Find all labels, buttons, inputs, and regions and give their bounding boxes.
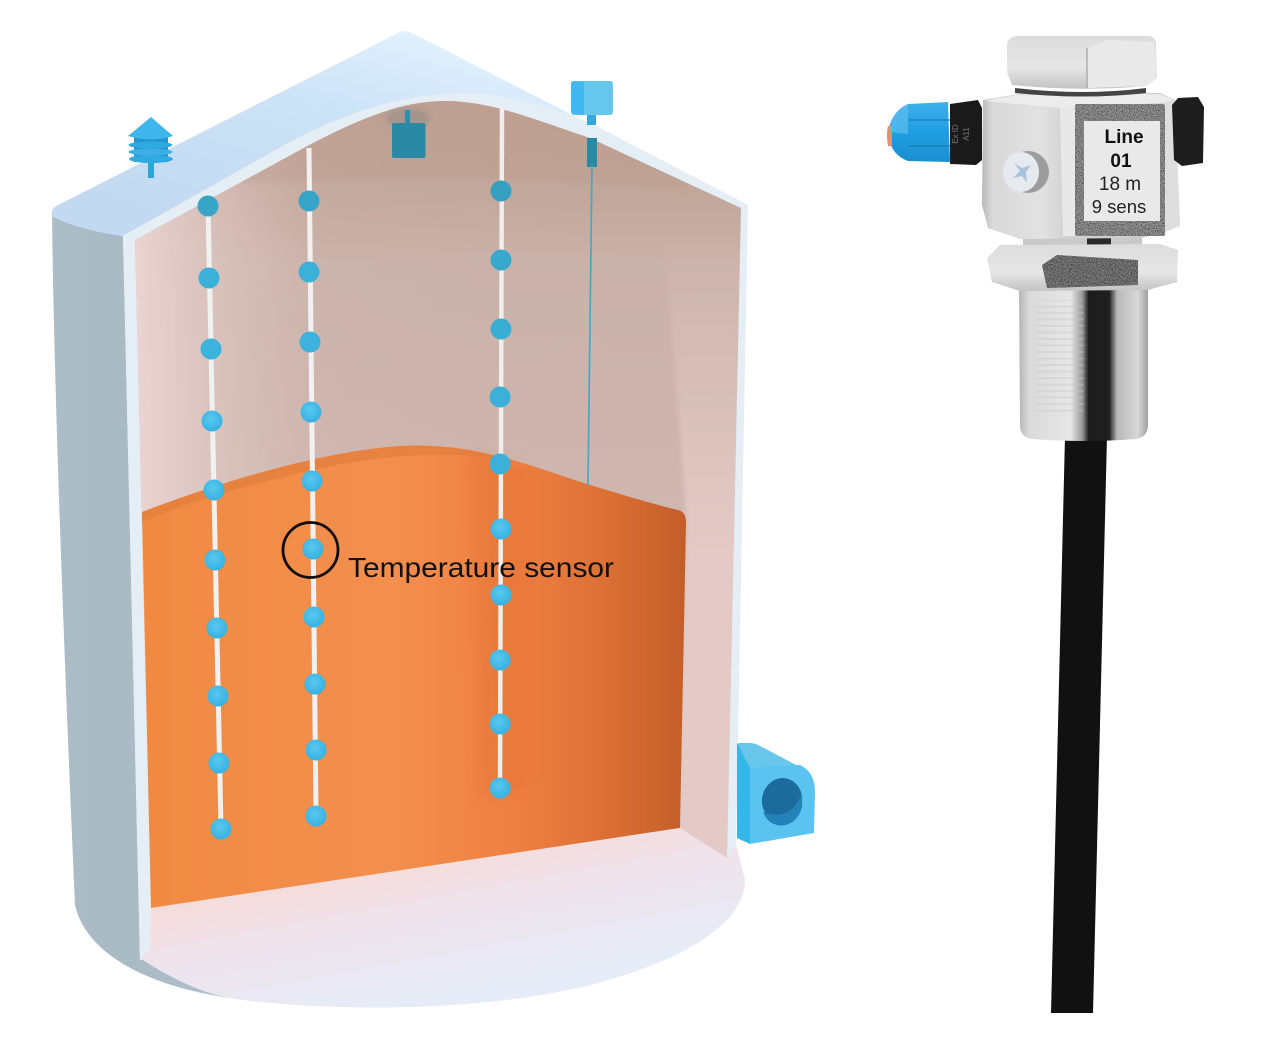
external connector box — [737, 743, 815, 844]
screw — [1003, 151, 1049, 193]
main body — [982, 93, 1180, 239]
floor front wall strip — [139, 908, 151, 958]
top hex nut — [1007, 36, 1157, 96]
white label — [1084, 121, 1160, 221]
right interior wall — [676, 326, 738, 852]
floor — [140, 828, 745, 1007]
white label: Line — [1104, 127, 1144, 148]
cut wall edge — [123, 94, 748, 960]
ceiling shade — [246, 101, 672, 182]
body top highlight — [985, 94, 1174, 108]
lower hex nut — [987, 244, 1178, 291]
cable gland: black section: Ex ID — [951, 124, 960, 144]
sensor cable 3 — [490, 108, 512, 798]
cable gland: black section — [950, 100, 982, 165]
sensor cable 1 — [198, 196, 232, 840]
silo outer shell side — [52, 214, 590, 1007]
radar level sensor — [386, 108, 430, 158]
grain pile — [142, 445, 686, 908]
silo illustration — [52, 31, 815, 1007]
black cable — [1051, 436, 1107, 1013]
right side facet — [1162, 100, 1180, 232]
right black nut — [1172, 97, 1204, 166]
collar — [1023, 236, 1142, 250]
vent icon — [128, 117, 173, 178]
silo roof — [52, 31, 748, 236]
product photo: sensor head with cable — [887, 36, 1204, 1013]
cable gland: black section: A11 — [962, 127, 971, 141]
body facet — [1060, 106, 1078, 236]
interior shading — [135, 101, 738, 852]
grain shadows near cables — [472, 448, 523, 463]
callout: temperature sensor: Temperature sensor — [348, 552, 614, 583]
white label: 01 — [1110, 151, 1132, 172]
callout: temperature sensor — [283, 522, 614, 583]
thread texture — [1036, 300, 1084, 415]
white label: 9 sens — [1092, 196, 1146, 217]
interior back wall — [135, 101, 741, 908]
lower threaded cylinder — [1019, 288, 1148, 441]
white label: 18 m — [1099, 174, 1141, 195]
sensor cable 2 — [298, 148, 326, 826]
grain darker ridge — [142, 446, 500, 522]
cable gland: blue cap — [887, 102, 950, 162]
level gauge with cable — [571, 81, 613, 485]
textured label panel — [1075, 104, 1165, 236]
